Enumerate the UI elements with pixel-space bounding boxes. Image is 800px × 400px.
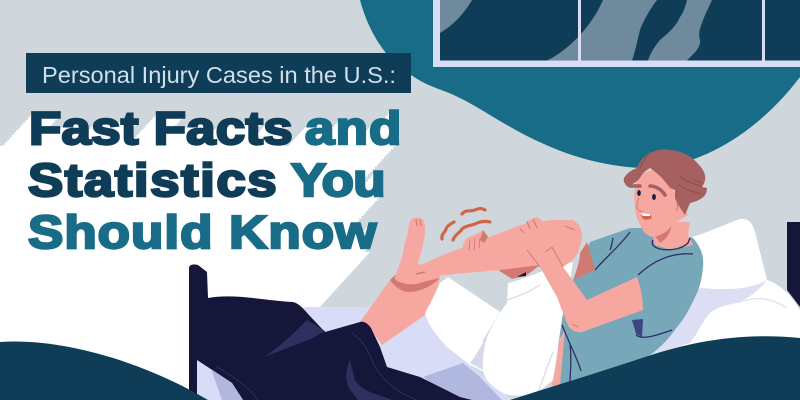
right bed post bbox=[787, 222, 800, 307]
ankle shadow band bbox=[390, 275, 440, 292]
behind-knee shadow bbox=[498, 265, 540, 279]
headline: You: You bbox=[291, 154, 385, 206]
mouth bbox=[640, 213, 652, 220]
teal blob bbox=[360, 0, 800, 168]
hair bbox=[624, 149, 707, 215]
back thigh shorts bbox=[425, 277, 500, 372]
bottom right dark wave bbox=[510, 336, 800, 400]
torso bbox=[558, 228, 703, 387]
pain marks bbox=[442, 208, 490, 240]
collar bbox=[652, 238, 690, 250]
bottom left dark wave bbox=[0, 342, 208, 400]
sheet shadow bbox=[423, 363, 502, 400]
far arm bbox=[573, 242, 595, 280]
inner thigh skin bbox=[550, 330, 565, 390]
sheet under headboard bbox=[197, 360, 243, 400]
subtitle banner: Personal Injury Cases in the U.S.: bbox=[42, 62, 396, 88]
window bbox=[433, 0, 800, 67]
subtitle banner bbox=[26, 53, 411, 93]
hand on shin bbox=[463, 230, 488, 252]
front shorts leg bbox=[483, 262, 573, 396]
lavender sheet bbox=[303, 307, 512, 400]
raised leg and foot bbox=[395, 218, 582, 283]
blanket folds bbox=[217, 320, 417, 400]
headline: and: and bbox=[305, 102, 402, 154]
near arm and hand bbox=[520, 217, 643, 332]
head bbox=[624, 149, 707, 250]
back lower leg bbox=[360, 276, 440, 345]
white diagonal band bbox=[0, 146, 370, 400]
sleeve cuff and shirt folds bbox=[562, 232, 693, 381]
eyes bbox=[637, 190, 641, 196]
headline: Should Know: Should Know bbox=[28, 206, 377, 258]
headline: Statistics: Statistics bbox=[28, 154, 278, 206]
dark blanket and headboard bbox=[189, 264, 472, 400]
pillow and bedding, right bbox=[640, 219, 800, 365]
headline: Fast Facts: Fast Facts bbox=[28, 102, 292, 154]
